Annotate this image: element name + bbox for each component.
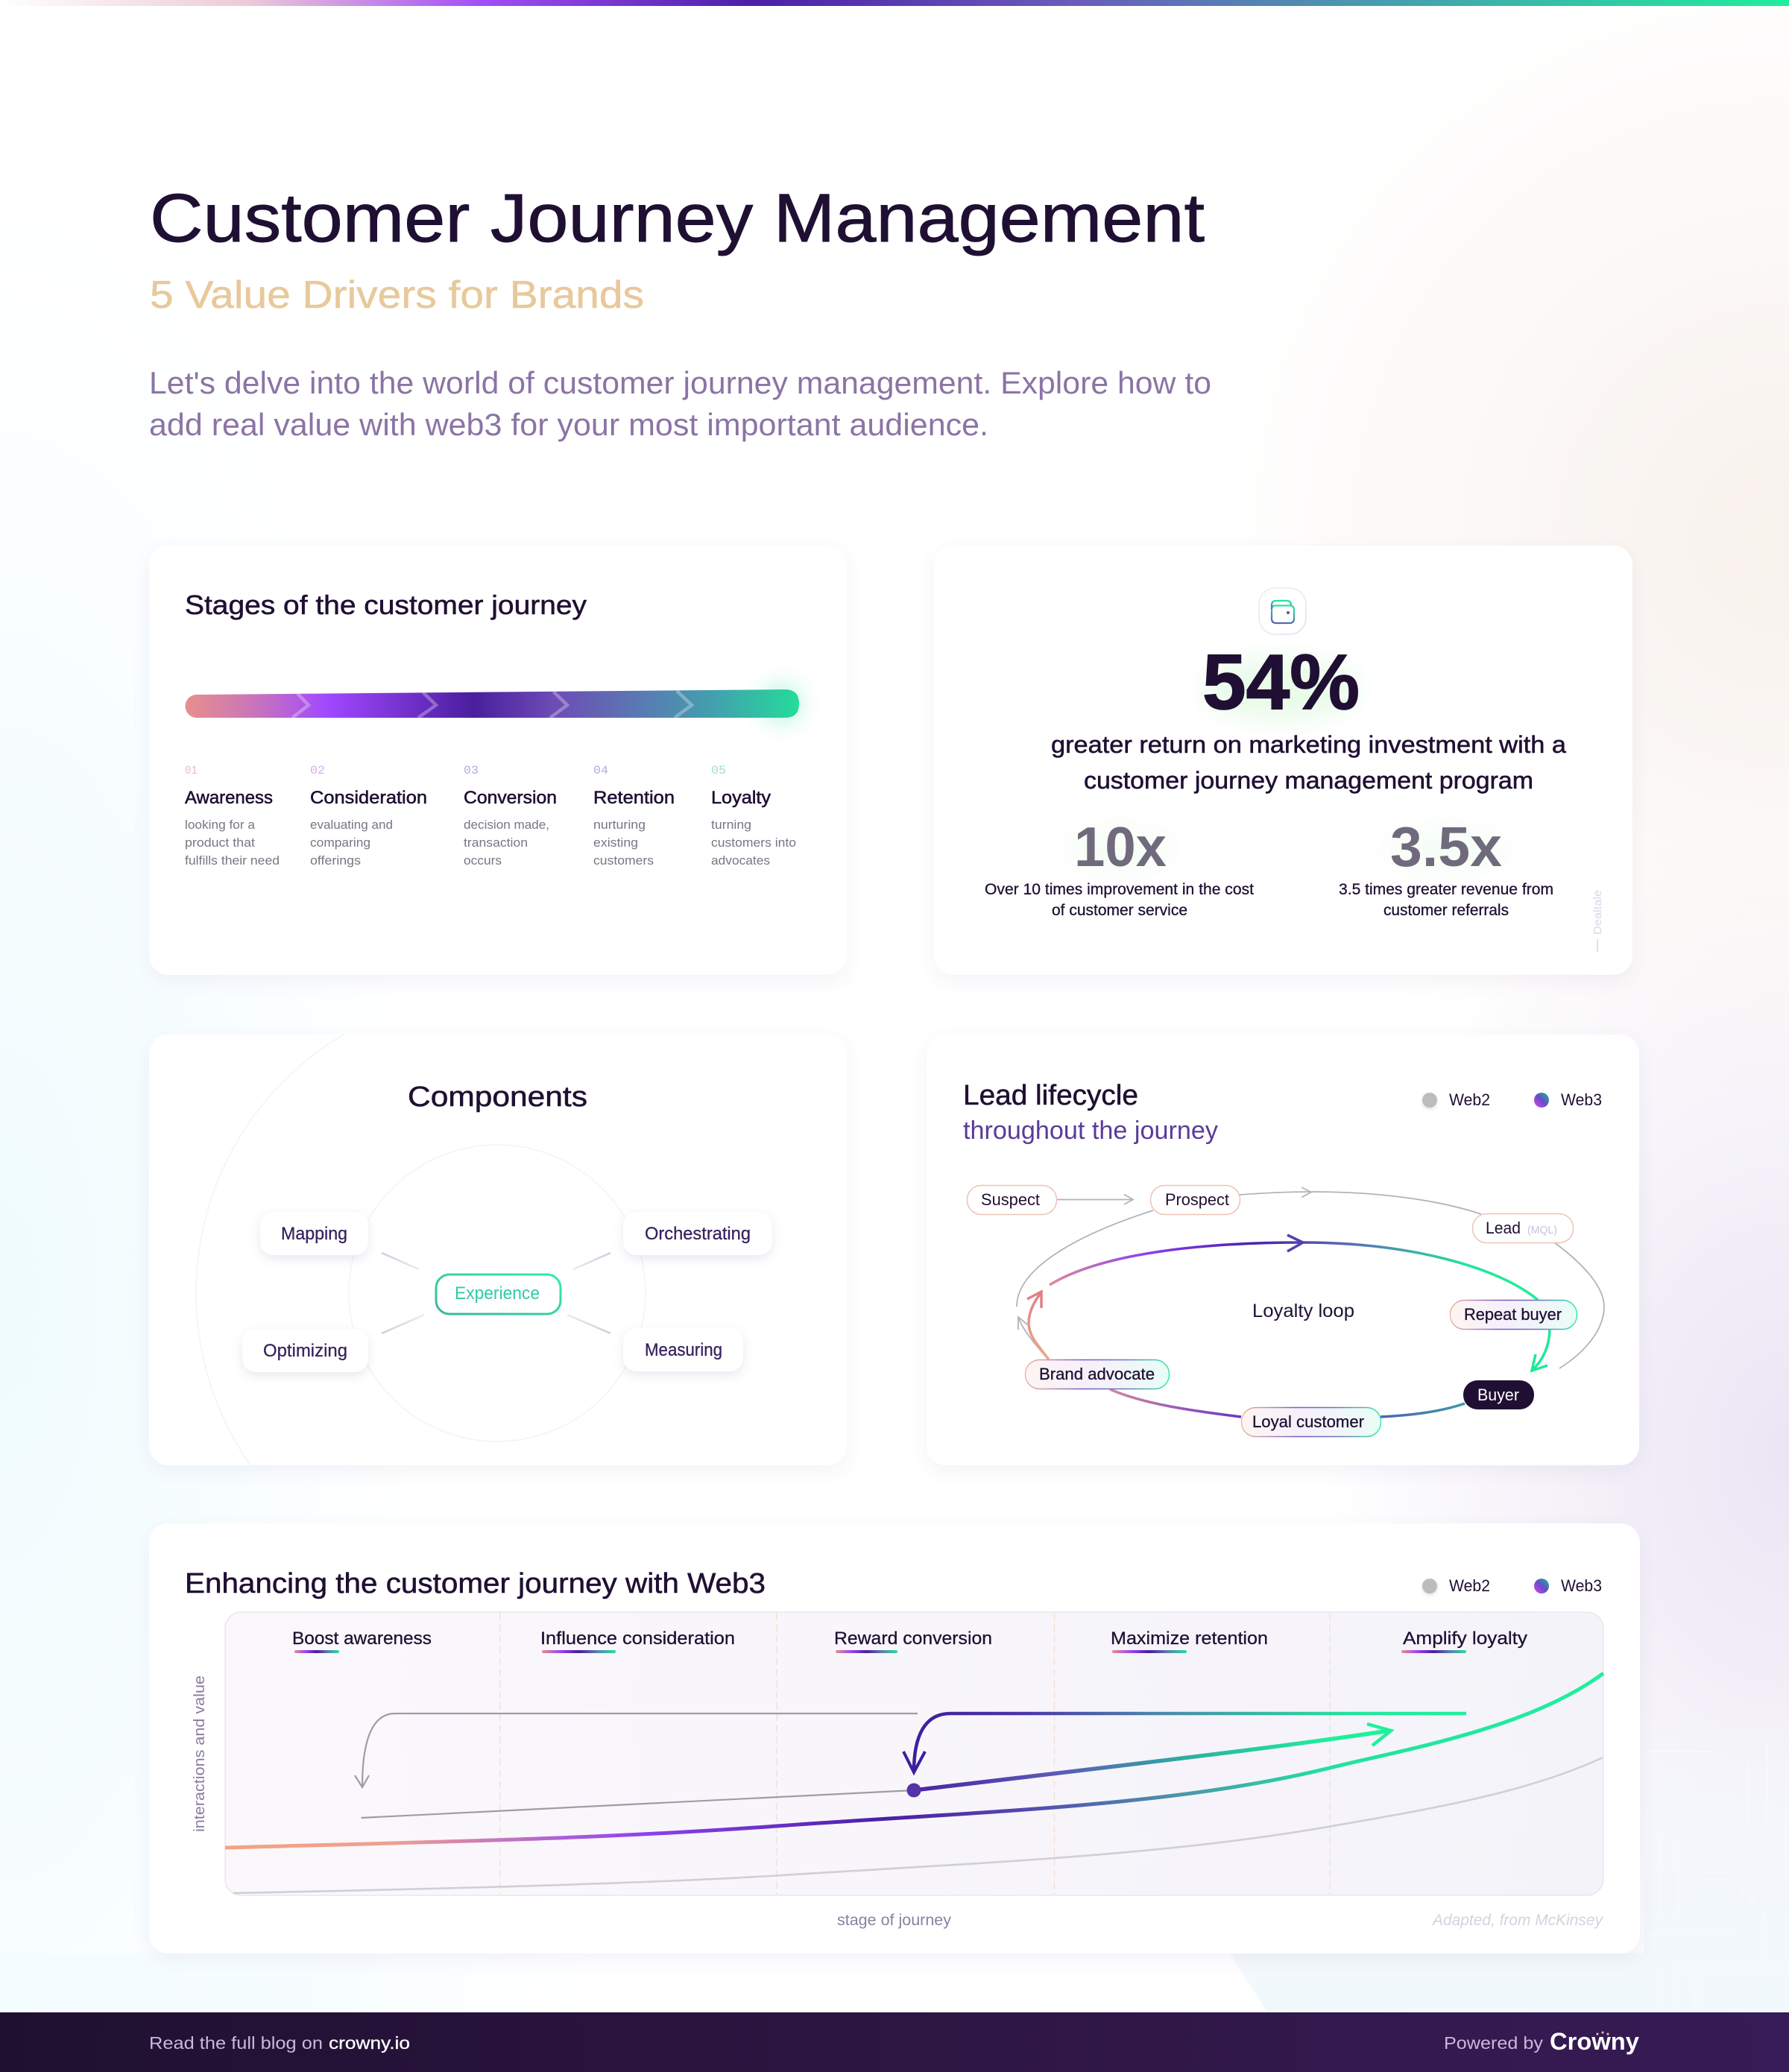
footer brand: Crowny: [1550, 2028, 1639, 2055]
connector lines: [382, 1253, 610, 1333]
node: lead MQL: (MQL): [1527, 1224, 1557, 1236]
node: mapping: [260, 1212, 368, 1255]
web3 loop arrow: [903, 1713, 1466, 1790]
stage 03 conversion: decision made,: [464, 818, 549, 832]
journey gradient bar: [185, 683, 802, 724]
legend: Web2: [1449, 1576, 1490, 1595]
stage label: influence consideration: Influence consideration: [540, 1629, 735, 1649]
node: buyer: [1463, 1380, 1534, 1409]
stage 01 awareness: Awareness: [185, 788, 273, 808]
stage 05 loyalty: 05: [711, 764, 726, 777]
stage 01 awareness: 01: [185, 764, 198, 777]
icon: wallet: [1259, 588, 1306, 634]
node: repeat buyer: Repeat buyer: [1464, 1305, 1562, 1324]
footer blog link: Read the full blog on: [149, 2033, 323, 2053]
web3 main curve: [225, 1673, 1603, 1848]
legend: Web3: [1561, 1576, 1602, 1595]
node: orchestrating: Orchestrating: [645, 1224, 751, 1244]
panel: key statistics: [934, 546, 1632, 975]
stat 10x: 10x: [1074, 815, 1167, 878]
heading: components: Components: [408, 1081, 587, 1113]
stage 03 conversion: transaction: [464, 836, 528, 850]
footer brand: Powered by: [1444, 2033, 1544, 2053]
panel: enhancing the customer journey with web3: [149, 1523, 1640, 1953]
footer blog link: crowny.io: [329, 2033, 410, 2053]
node: measuring: Measuring: [645, 1340, 722, 1360]
stage 01 awareness: product that: [185, 836, 255, 850]
node: suspect: [968, 1185, 1057, 1215]
title: Customer Journey Management: [150, 180, 1205, 256]
web2 loop arrow: [355, 1713, 918, 1818]
stage 01 awareness: [185, 764, 280, 868]
stage 04 retention: [593, 764, 675, 868]
stage label: maximize retention: Maximize retention: [1111, 1629, 1268, 1649]
y axis label: interactions and value: [192, 1675, 208, 1832]
legend: Web3: [1561, 1090, 1602, 1109]
stage 05 loyalty: Loyalty: [711, 788, 771, 808]
node: loyal customer: Loyal customer: [1252, 1412, 1364, 1431]
node: lead MQL: [1473, 1213, 1573, 1243]
stat 3.5x: [1339, 815, 1553, 919]
node: suspect: Suspect: [981, 1190, 1040, 1209]
stage label: reward conversion: Reward conversion: [834, 1629, 992, 1649]
node: optimizing: [242, 1329, 368, 1372]
node: prospect: [1151, 1185, 1240, 1215]
subtitle: 5 Value Drivers for Brands: [150, 274, 644, 317]
stat 10x: [985, 815, 1254, 919]
node: brand advocate: Brand advocate: [1039, 1365, 1155, 1383]
node: experience: [436, 1275, 561, 1314]
stage 02 consideration: [310, 764, 427, 868]
stat description: [1051, 731, 1566, 794]
stage 03 conversion: occurs: [464, 853, 502, 868]
intro text: add real value with web3 for your most important audience.: [149, 407, 988, 442]
heading: lead lifecycle: Lead lifecycle: [963, 1080, 1138, 1111]
node: prospect: Prospect: [1165, 1190, 1229, 1209]
stage 03 conversion: [464, 764, 557, 868]
node: optimizing: Optimizing: [263, 1341, 347, 1361]
legend: [1422, 1576, 1602, 1595]
web2 baseline curve: [233, 1757, 1603, 1893]
concentric circles: [196, 1035, 646, 1465]
header: title, subtitle and intro: [149, 180, 1211, 442]
panel: lead lifecycle: [927, 1035, 1639, 1465]
stage 02 consideration: Consideration: [310, 788, 427, 808]
big stat 54%: 54%: [1202, 639, 1360, 726]
legend: Web2: [1449, 1090, 1490, 1109]
stage label: boost awareness: Boost awareness: [292, 1629, 432, 1649]
web3 loyalty loop: [1027, 1235, 1550, 1417]
stat description: greater return on marketing investment with a: [1051, 731, 1566, 758]
stage 03 conversion: Conversion: [464, 788, 557, 808]
stat 10x: Over 10 times improvement in the cost: [985, 881, 1254, 898]
panel: stages of the customer journey: [149, 546, 847, 975]
node: loyal customer: [1242, 1407, 1381, 1437]
stage 04 retention: customers: [593, 853, 654, 868]
top gradient bar: [37, 0, 1789, 6]
web2 grey path: [1017, 1187, 1604, 1368]
label: loyalty loop: Loyalty loop: [1252, 1301, 1354, 1321]
intro text: [149, 365, 1211, 442]
stage 04 retention: 04: [593, 764, 608, 777]
stat 10x: of customer service: [1052, 902, 1187, 919]
stage 02 consideration: offerings: [310, 853, 361, 868]
panel: components: [149, 1035, 847, 1465]
stage 03 conversion: 03: [464, 764, 479, 777]
source: Dealtale: [1591, 890, 1604, 952]
node: mapping: Mapping: [281, 1224, 347, 1244]
stage 05 loyalty: [711, 764, 796, 868]
heading: stages: Stages of the customer journey: [185, 590, 587, 620]
chart: [225, 1612, 1603, 1895]
subheading: throughout the journey: [963, 1116, 1218, 1145]
stage 04 retention: existing: [593, 836, 638, 850]
node: orchestrating: [623, 1212, 772, 1255]
x axis label: stage of journey: [837, 1912, 952, 1929]
node: repeat buyer: [1451, 1300, 1577, 1330]
stage 05 loyalty: turning: [711, 818, 751, 832]
stat 3.5x: customer referrals: [1383, 902, 1509, 919]
node: brand advocate: [1026, 1359, 1169, 1389]
stage 02 consideration: evaluating and: [310, 818, 393, 832]
conversion point: [906, 1783, 921, 1798]
stat 3.5x: 3.5 times greater revenue from: [1339, 881, 1553, 898]
stat 3.5x: 3.5x: [1390, 815, 1502, 878]
footer: [0, 2012, 1789, 2072]
stage 02 consideration: comparing: [310, 836, 370, 850]
footer blog link: [149, 2033, 410, 2053]
stage 05 loyalty: customers into: [711, 836, 796, 850]
stage 04 retention: nurturing: [593, 818, 646, 832]
stage 05 loyalty: advocates: [711, 853, 770, 868]
stage 01 awareness: looking for a: [185, 818, 256, 832]
stage label: amplify loyalty: Amplify loyalty: [1403, 1629, 1527, 1649]
stage 04 retention: Retention: [593, 788, 675, 808]
footer brand: [1444, 2028, 1639, 2055]
legend: [1422, 1090, 1602, 1109]
source: Dealtale: Dealtale: [1591, 890, 1604, 935]
stage 01 awareness: fulfills their need: [185, 853, 280, 868]
stage 02 consideration: 02: [310, 764, 325, 777]
intro text: Let's delve into the world of customer journey management. Explore how to: [149, 365, 1211, 400]
node: experience: Experience: [455, 1283, 540, 1304]
node: buyer: Buyer: [1477, 1386, 1519, 1404]
node: lead MQL: Lead: [1486, 1219, 1521, 1237]
node: measuring: [623, 1328, 743, 1371]
heading: enhancing: Enhancing the customer journey with Web3: [185, 1568, 766, 1599]
source note: Adapted, from McKinsey: [1431, 1912, 1603, 1929]
stat description: customer journey management program: [1084, 767, 1533, 794]
